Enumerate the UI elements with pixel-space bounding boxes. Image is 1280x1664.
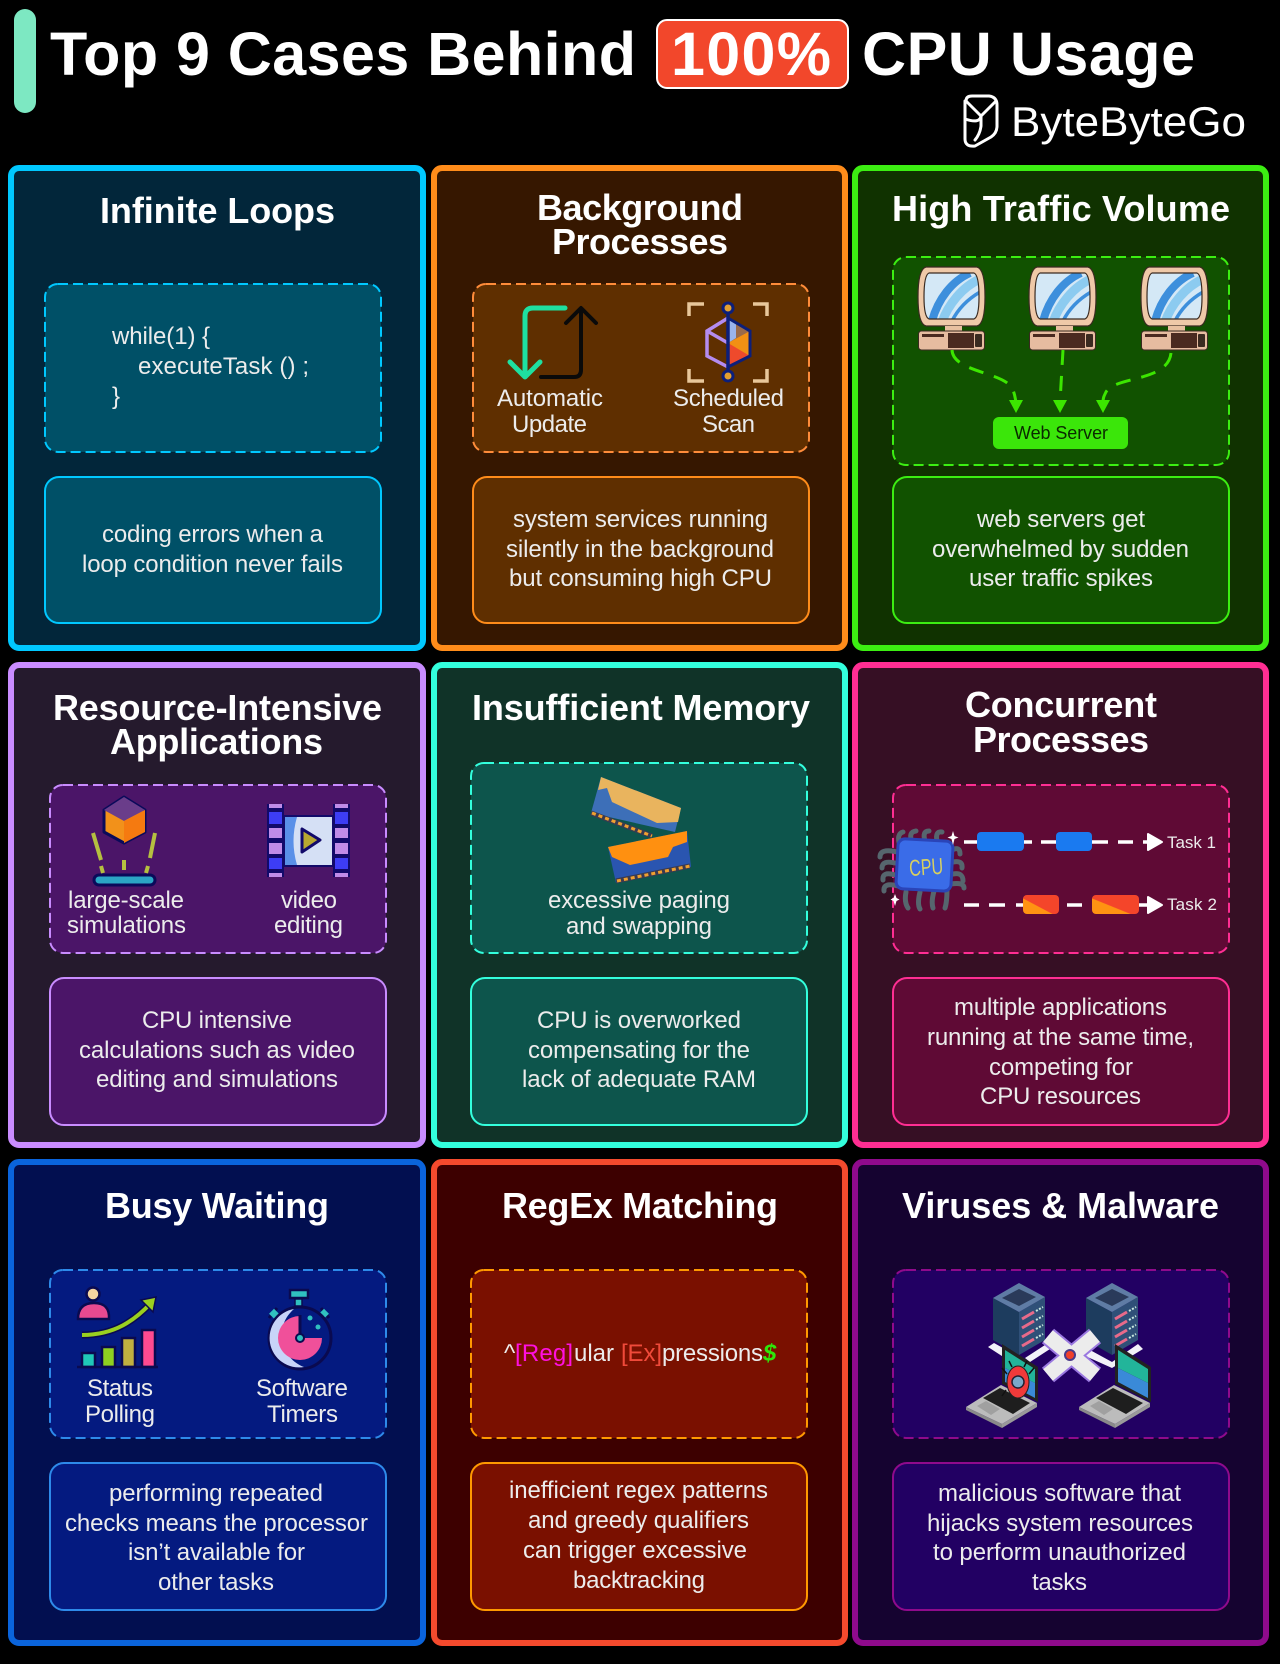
illustrations box <box>50 785 386 953</box>
heading: Busy Waiting <box>105 1185 329 1226</box>
description: can trigger excessive <box>523 1537 747 1564</box>
heading: Background <box>537 187 743 228</box>
heading: Infinite Loops <box>100 190 335 231</box>
panel frame <box>11 665 423 1145</box>
label: status polling: Status <box>87 1375 153 1402</box>
heading <box>53 687 382 762</box>
heading <box>537 187 743 262</box>
heading: RegEx Matching <box>502 1185 778 1226</box>
label: scheduled scan: Scan <box>702 411 755 438</box>
regex expression: [Reg] <box>515 1340 573 1367</box>
panel: resource-intensive applications <box>11 665 423 1145</box>
description <box>473 477 809 623</box>
description: other tasks <box>158 1569 274 1596</box>
label: task 1: Task 1 <box>1167 833 1216 852</box>
diagram box <box>893 257 1229 465</box>
panel frame <box>434 168 845 648</box>
logo: ByteByteGo: ByteByteGo <box>1011 98 1246 145</box>
code text <box>111 323 309 410</box>
panel frame <box>855 665 1266 1145</box>
diagram box <box>880 785 1229 953</box>
task 1 timeline <box>964 832 1216 852</box>
label: software timers: Timers <box>267 1401 338 1428</box>
description <box>893 978 1229 1125</box>
label: video editing: video <box>281 887 337 914</box>
regex expression: $ <box>762 1340 777 1367</box>
description: tasks <box>1032 1569 1087 1596</box>
label: scheduled scan <box>673 385 784 438</box>
label: task 2: Task 2 <box>1167 895 1217 914</box>
description <box>50 978 386 1125</box>
panel frame <box>11 1162 423 1643</box>
description: coding errors when a <box>102 521 324 548</box>
panel: busy waiting <box>11 1162 423 1643</box>
label: excessive paging and swapping: excessive paging <box>548 887 730 914</box>
description: CPU resources <box>980 1083 1141 1110</box>
code text: executeTask () ; <box>138 353 309 380</box>
illustration box <box>893 1270 1229 1438</box>
heading: Applications <box>110 721 323 762</box>
description: silently in the background <box>506 536 774 563</box>
web server badge: Web Server <box>1014 423 1108 443</box>
description <box>471 1463 807 1610</box>
label: video editing: editing <box>274 912 343 939</box>
panel: regex matching <box>434 1162 845 1643</box>
description: competing for <box>989 1054 1133 1081</box>
description: lack of adequate RAM <box>522 1066 756 1093</box>
regex expression: pressions <box>662 1340 763 1367</box>
description: isn’t available for <box>128 1539 305 1566</box>
icon: CPU chip <box>880 831 964 909</box>
icon: RAM sticks <box>591 777 691 883</box>
regex expression: [Ex] <box>621 1340 662 1367</box>
code box <box>45 284 381 452</box>
title <box>50 20 1195 88</box>
header <box>14 9 1246 146</box>
description: calculations such as video <box>79 1037 355 1064</box>
description: checks means the processor <box>65 1510 368 1537</box>
icon: scheduled scan <box>689 303 767 381</box>
panel: high traffic volume <box>855 168 1266 648</box>
panel frame <box>855 168 1266 648</box>
description: overwhelmed by sudden <box>932 536 1189 563</box>
heading: Processes <box>552 221 728 262</box>
illustrations box <box>50 1270 386 1438</box>
description: CPU is overworked <box>537 1007 741 1034</box>
description: user traffic spikes <box>969 565 1153 592</box>
panel: infinite loops <box>11 168 423 648</box>
icon: status polling chart <box>77 1288 158 1367</box>
label: large-scale simulations: simulations <box>67 912 186 939</box>
label: software timers: Software <box>256 1375 348 1402</box>
panel: concurrent processes <box>855 665 1266 1145</box>
icon: infected network <box>966 1283 1151 1428</box>
description: malicious software that <box>938 1480 1181 1507</box>
icon: update arrows <box>510 308 596 377</box>
panel: viruses and malware <box>855 1162 1266 1643</box>
badge: 100%: 100% <box>671 20 831 88</box>
description: multiple applications <box>954 994 1167 1021</box>
heading: High Traffic Volume <box>892 188 1230 229</box>
description: inefficient regex patterns <box>509 1477 768 1504</box>
label: automatic update <box>497 385 603 438</box>
illustrations box <box>473 284 809 452</box>
description: but consuming high CPU <box>509 565 772 592</box>
label: software timers <box>256 1375 348 1428</box>
panel: insufficient memory <box>434 665 845 1145</box>
web server badge <box>993 417 1128 449</box>
description <box>893 477 1229 623</box>
title: CPU Usage <box>862 20 1195 88</box>
heading: Viruses & Malware <box>902 1185 1219 1226</box>
label: large-scale simulations <box>67 887 186 939</box>
icon: CPU chip: CPU <box>908 853 944 881</box>
icon: video film strip <box>267 804 350 877</box>
heading: Insufficient Memory <box>472 687 810 728</box>
regex expression: ^ <box>504 1340 516 1367</box>
description: compensating for the <box>528 1037 750 1064</box>
label: status polling <box>85 1375 155 1428</box>
panel frame <box>855 1162 1266 1643</box>
icon: software timer <box>269 1290 331 1369</box>
title: Top 9 Cases Behind <box>50 20 636 88</box>
label: excessive paging and swapping: and swapping <box>566 913 712 940</box>
description: web servers get <box>976 506 1145 533</box>
description: running at the same time, <box>927 1024 1194 1051</box>
accent bar <box>14 9 36 113</box>
code text: } <box>112 383 120 410</box>
code text: while(1) { <box>111 323 210 350</box>
label: excessive paging and swapping <box>548 887 730 940</box>
description: hijacks system resources <box>927 1510 1193 1537</box>
icon: client computers <box>918 267 1208 350</box>
description <box>893 1463 1229 1610</box>
arrows to server <box>952 350 1171 413</box>
panel frame <box>434 1162 845 1643</box>
description <box>45 477 381 623</box>
description: editing and simulations <box>96 1066 338 1093</box>
panel frame <box>11 168 423 648</box>
description: system services running <box>513 506 768 533</box>
regex expression: ular <box>574 1340 614 1367</box>
label: automatic update: Automatic <box>497 385 603 412</box>
icon: hologram cube <box>93 797 155 885</box>
label: status polling: Polling <box>85 1401 155 1428</box>
description: and greedy qualifiers <box>528 1507 749 1534</box>
description: performing repeated <box>109 1480 323 1507</box>
label: scheduled scan: Scheduled <box>673 385 784 412</box>
illustration box <box>471 763 807 953</box>
icon: logo mark <box>965 96 997 146</box>
heading: Concurrent <box>965 684 1157 725</box>
label: video editing <box>274 887 343 939</box>
regex expression <box>504 1340 777 1367</box>
heading <box>965 684 1157 760</box>
label: large-scale simulations: large-scale <box>68 887 184 914</box>
panel frame <box>434 665 845 1145</box>
panel: background processes <box>434 168 845 648</box>
heading: Processes <box>973 719 1149 760</box>
heading: Resource-Intensive <box>53 687 382 728</box>
regex box <box>471 1270 807 1438</box>
task 2 timeline <box>964 895 1217 914</box>
description: backtracking <box>573 1567 705 1594</box>
description: to perform unauthorized <box>933 1539 1186 1566</box>
label: automatic update: Update <box>512 411 587 438</box>
description: loop condition never fails <box>82 551 343 578</box>
description: CPU intensive <box>142 1007 292 1034</box>
description <box>471 978 807 1125</box>
description <box>50 1463 386 1610</box>
